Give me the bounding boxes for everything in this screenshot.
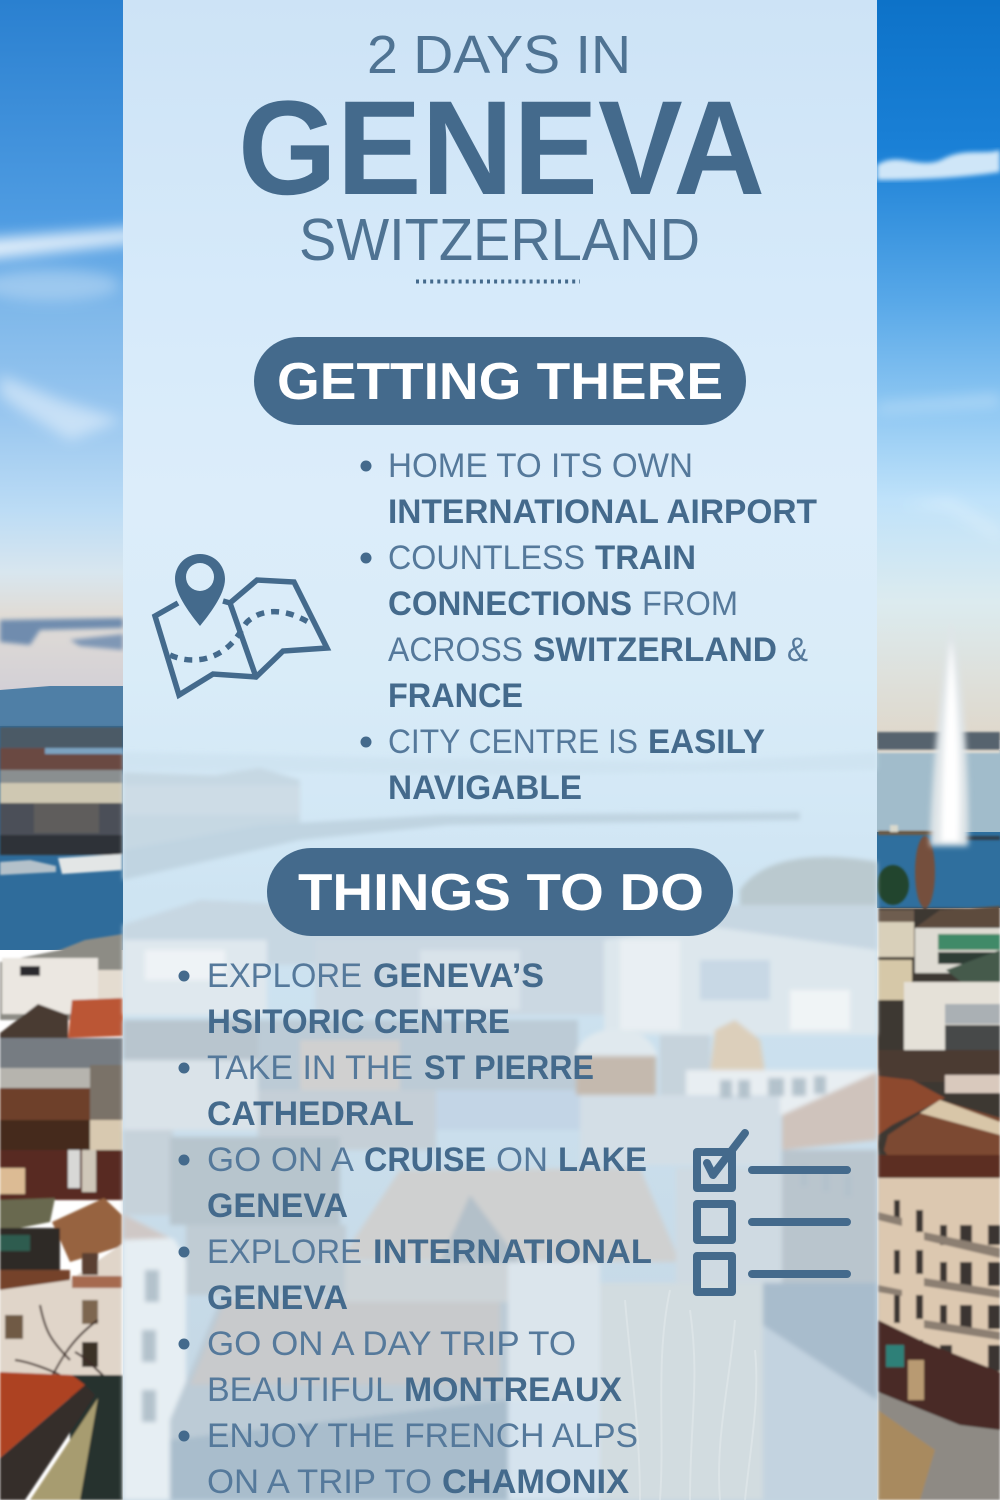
item: cathedral: TAKE IN THE — [207, 1049, 413, 1087]
item: city centre: EASILY — [648, 723, 765, 761]
orange roof — [68, 998, 123, 1038]
item: Chamonix: ENJOY THE FRENCH ALPS — [207, 1417, 638, 1455]
item: city centre — [360, 723, 765, 807]
item: Chamonix: CHAMONIX — [442, 1463, 629, 1500]
item: cruise: GO ON A — [207, 1141, 354, 1179]
trees right — [877, 865, 909, 905]
item: trains: FROM — [642, 585, 738, 623]
background photo: right side with Jet d'Eau — [877, 0, 1000, 1500]
heading pill: getting there — [254, 337, 746, 425]
item: trains: & — [787, 631, 808, 669]
heading pill: things to do: THINGS TO DO — [298, 864, 704, 922]
item: Montreaux — [178, 1325, 622, 1409]
item: city centre: CITY CENTRE IS — [388, 723, 638, 761]
red roof left — [70, 1375, 123, 1500]
title — [238, 25, 765, 273]
list: things to do — [178, 957, 652, 1500]
item: international Geneva: INTERNATIONAL — [373, 1233, 652, 1271]
item: airport: HOME TO ITS OWN — [388, 447, 693, 485]
item: trains — [360, 539, 808, 715]
item: cruise: CRUISE — [364, 1141, 486, 1179]
item: Montreaux: BEAUTIFUL — [207, 1371, 394, 1409]
title line: Geneva: GENEVA — [238, 74, 765, 223]
item: airport: INTERNATIONAL AIRPORT — [388, 493, 817, 531]
hotels left shore — [0, 770, 123, 785]
item: trains: FRANCE — [388, 677, 523, 715]
background photo: left side of Geneva skyline — [0, 0, 140, 1500]
item: cruise: GENEVA — [207, 1187, 348, 1225]
item: Montreaux: GO ON A DAY TRIP TO — [207, 1325, 576, 1363]
title line: Switzerland: SWITZERLAND — [299, 207, 700, 273]
item: cruise: ON — [496, 1141, 548, 1179]
translucent central panel with faded city view — [123, 0, 877, 1500]
item: cathedral — [178, 1049, 594, 1133]
item: Chamonix: ON A TRIP TO — [207, 1463, 432, 1500]
title line: 2 days in: 2 DAYS IN — [367, 25, 631, 85]
item: cruise: LAKE — [558, 1141, 647, 1179]
jet d'eau fountain — [930, 620, 968, 846]
item: Chamonix — [178, 1417, 638, 1500]
item: trains: ACROSS — [388, 631, 523, 669]
item: trains: COUNTLESS — [388, 539, 585, 577]
heading pill: getting there: GETTING THERE — [277, 353, 723, 411]
buildings right — [878, 908, 1000, 1500]
icon: checklist — [697, 1133, 847, 1292]
cream building left — [0, 1244, 122, 1380]
item: historic centre: EXPLORE — [207, 957, 362, 995]
item: historic centre: GENEVA’S — [373, 957, 544, 995]
item: international Geneva — [178, 1233, 652, 1317]
faded windows — [142, 1076, 852, 1422]
roofs left — [0, 1038, 123, 1068]
item: trains: SWITZERLAND — [533, 631, 777, 669]
item: trains: CONNECTIONS — [388, 585, 632, 623]
item: airport — [360, 447, 817, 531]
item: cruise — [178, 1141, 647, 1225]
item: international Geneva: EXPLORE — [207, 1233, 362, 1271]
faded bare tree — [625, 1290, 756, 1500]
heading pill: things to do — [267, 848, 733, 936]
icon: map with location pin — [155, 554, 327, 695]
white building left — [0, 934, 123, 1020]
item: trains: TRAIN — [595, 539, 696, 577]
item: cathedral: CATHEDRAL — [207, 1095, 414, 1133]
item: Montreaux: MONTREAUX — [404, 1371, 622, 1409]
item: historic centre — [178, 957, 544, 1041]
far shore — [0, 727, 123, 748]
item: international Geneva: GENEVA — [207, 1279, 348, 1317]
item: cathedral: ST PIERRE — [424, 1049, 594, 1087]
item: city centre: NAVIGABLE — [388, 769, 582, 807]
list: getting there — [360, 447, 817, 807]
item: historic centre: HSITORIC CENTRE — [207, 1003, 510, 1041]
